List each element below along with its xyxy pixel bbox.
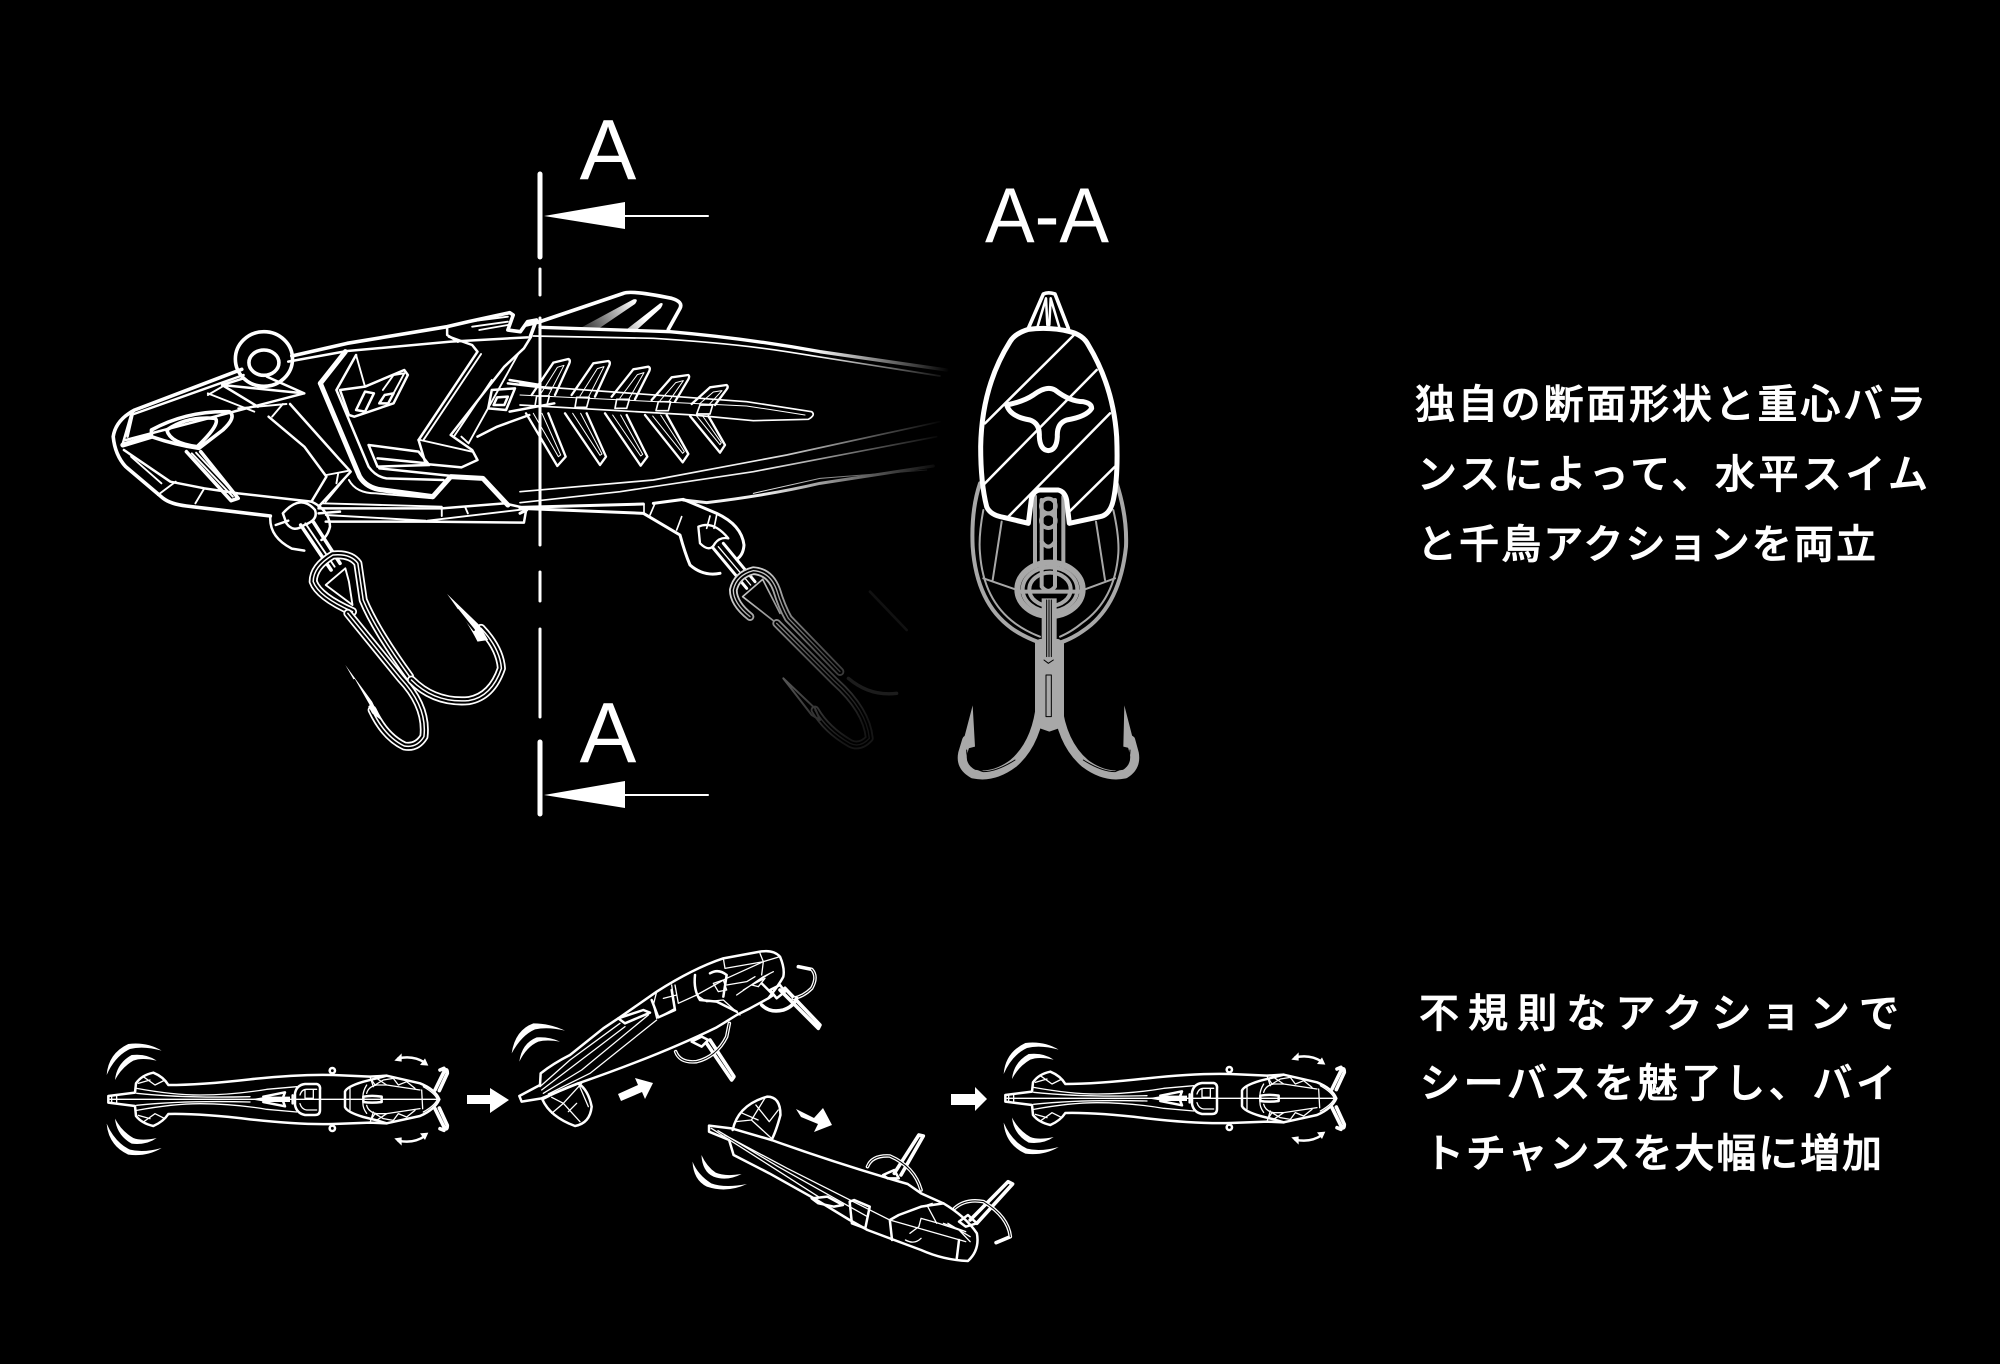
lower hook	[676, 1023, 734, 1080]
line eye ring	[235, 332, 292, 386]
label: A-A: A-A	[985, 171, 1109, 259]
tail wake marks	[693, 1155, 747, 1189]
greyed treble hook	[958, 598, 1138, 775]
collar	[1192, 1083, 1217, 1114]
T-shaped weight section	[1007, 388, 1092, 451]
section line A-A	[538, 174, 542, 814]
backbone ribs	[526, 359, 728, 466]
inner chamber	[340, 337, 531, 477]
upper hook	[762, 967, 820, 1028]
front hook eye and swivel	[270, 502, 340, 570]
text block: action description: トチャンスを大幅に増加	[1424, 1132, 1882, 1176]
arrow: step 4	[951, 1087, 987, 1111]
body outline	[108, 1073, 439, 1126]
arrow: step 2	[618, 1078, 653, 1101]
belly keel mark	[251, 1092, 293, 1106]
label: bottom A: A	[580, 686, 637, 781]
top-view lure 4	[1004, 1043, 1344, 1154]
rear split ring and fading hook	[733, 571, 907, 745]
tail wake marks	[1004, 1043, 1059, 1154]
body outline	[1005, 1072, 1336, 1125]
belly frame	[319, 352, 526, 523]
tail fin contours	[552, 1083, 588, 1122]
section outline	[981, 328, 1117, 523]
head swing arrows	[394, 1053, 428, 1146]
text block: cross-section description	[1415, 383, 1928, 567]
backbone tail	[520, 383, 813, 421]
head swing arrows	[1291, 1052, 1325, 1145]
eye socket	[123, 412, 232, 448]
rear hook eye	[520, 499, 755, 588]
section hatching	[983, 336, 1115, 518]
body outline	[519, 951, 784, 1102]
body contour lines	[540, 953, 780, 1094]
greyed hook ring	[1017, 563, 1083, 616]
text block: cross-section description: ンスによって、水平スイム	[1417, 453, 1928, 497]
front backbone block	[477, 380, 554, 437]
lure side view: front half	[113, 313, 554, 746]
body outline	[709, 1126, 978, 1261]
greyed lower body	[972, 483, 1126, 643]
dorsal nubs and hook tips	[1227, 1067, 1344, 1130]
front split ring and hook	[313, 555, 501, 746]
arrow: top section arrow	[544, 202, 708, 229]
head and body outline	[113, 313, 536, 516]
dorsal fin	[526, 292, 681, 330]
arrow: step 3	[796, 1108, 832, 1132]
text block: cross-section description: 独自の断面形状と重心バラ	[1415, 383, 1926, 427]
lure side view: fading rear half	[520, 292, 947, 745]
top-view lure 1	[107, 1044, 447, 1155]
dorsal nubs and hook tips	[330, 1068, 447, 1131]
arrow: bottom section arrow	[544, 781, 708, 808]
lure cross-section view	[958, 293, 1138, 775]
body contour lines	[711, 1128, 970, 1258]
body contour lines	[110, 1077, 439, 1122]
tilted lure 2	[512, 951, 820, 1126]
head strut and jaw	[124, 404, 351, 507]
tail wake marks	[107, 1044, 162, 1155]
lower hook	[955, 1182, 1013, 1243]
tail fin	[542, 1083, 592, 1126]
upper hook	[868, 1135, 923, 1190]
arrow: step 1	[467, 1088, 509, 1113]
label: top A: A	[580, 103, 637, 198]
tail fin contours	[736, 1098, 778, 1138]
collar	[295, 1084, 320, 1115]
tilted lure 3	[693, 1097, 1013, 1261]
upper body lines fading	[533, 327, 947, 376]
greyed swivel column	[1035, 497, 1063, 591]
lower body lines fading	[520, 422, 940, 513]
head contours	[345, 1076, 437, 1123]
text block: cross-section description: と千鳥アクションを両立	[1417, 523, 1876, 567]
tail fin	[733, 1097, 780, 1140]
text block: action description	[1419, 992, 1899, 1176]
belly keel mark	[1148, 1091, 1190, 1105]
body contour lines	[1007, 1076, 1336, 1121]
top fin section	[1028, 293, 1068, 328]
tail wake marks	[512, 1023, 565, 1062]
text block: action description: シーバスを魅了し、バイ	[1420, 1062, 1896, 1106]
head contours	[1242, 1075, 1334, 1122]
text block: action description: 不規則なアクションで	[1419, 992, 1899, 1036]
